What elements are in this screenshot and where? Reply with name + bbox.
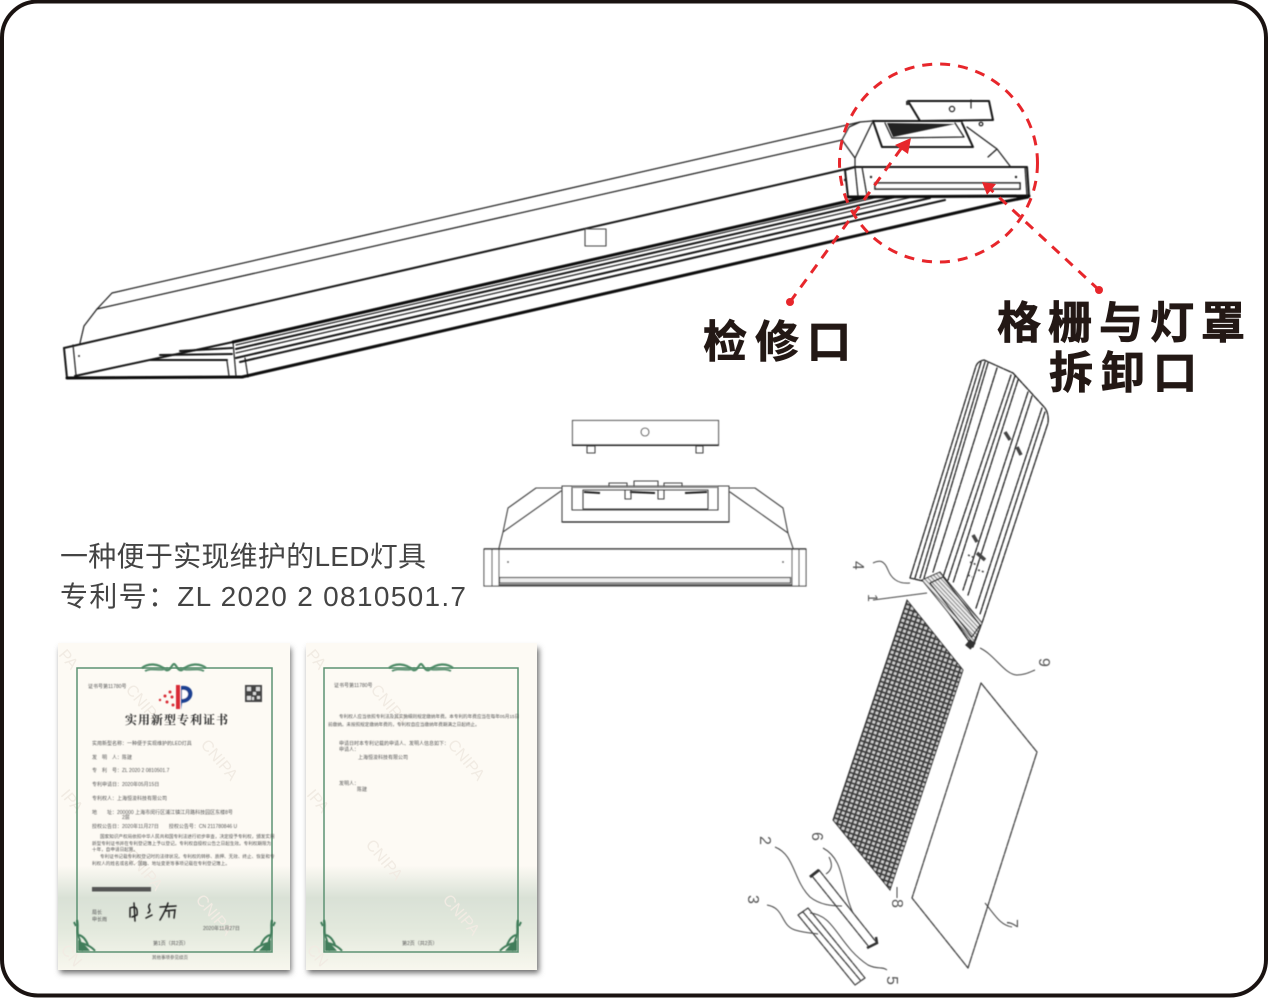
director title [92,909,107,923]
green border [324,668,518,952]
part 6: 6 [808,832,825,841]
fixture right end panel [844,167,1029,197]
certificate page two [303,643,539,973]
footer note: 其他事项参见续页 [152,954,188,961]
front view drawing [484,420,806,586]
part 2 [756,836,842,906]
QR code [245,685,262,702]
corner ornaments [74,920,275,951]
page sheet [58,643,290,970]
page sheet [306,643,537,970]
patent name: 一种便于实现维护的LED灯具 [60,541,426,572]
front panel [484,549,806,586]
patent name and number [60,541,466,615]
notice text [328,713,519,728]
dashed highlight circle [840,64,1038,262]
green border [77,668,272,952]
notice text: 前缴纳。未按照规定缴纳年费的，专利权自应当缴纳年费期满之日起终止。 [328,721,480,728]
part 1: 1 [865,594,881,602]
watermarks: CNIPA [192,892,236,939]
applicant and inventor details: 发明人： [339,780,359,787]
certificate page one [55,643,291,973]
certificate details [92,740,238,830]
inspection lid [906,100,993,126]
watermarks [303,647,488,970]
part 4: 4 [849,561,866,570]
label: removal opening: 拆卸口 [1049,349,1205,398]
part 2: 2 [756,836,773,845]
top ornament [142,664,206,671]
applicant and inventor details: 陈建 [357,786,367,793]
applicant and inventor details [339,740,449,793]
label: grille and cover: 格栅与灯罩 [997,299,1252,348]
watermarks: CNIPA [367,682,411,729]
exploded view drawing [744,360,1052,985]
notice text: 专利权人应当依照专利法及其实施细则规定缴纳年费。本专利的年费应当在每年05月15日 [339,713,519,720]
body [499,481,793,548]
certificate number: 证书号第11780号 [334,682,373,689]
watermarks: CNIPA [197,737,241,784]
certificate details: 专 利 号：ZL 2020 2 0810501.7 [92,767,170,774]
applicant and inventor details: 上海恒浚科技有限公司 [358,754,408,761]
CNIPA emblem [159,685,192,710]
watermarks: CN [303,942,331,970]
part 3 [744,895,818,934]
fixture housing top [64,121,872,348]
watermarks: CN [57,942,85,970]
watermarks: CNIPA [362,837,406,884]
applicant and inventor details: 申请日时本专利记载的申请人、发明人信息如下： [339,740,449,747]
patent number: 专利号：ZL 2020 2 0810501.7 [60,575,466,615]
page shadow [60,648,291,973]
corner ornaments [321,920,521,951]
fixture centre clip [585,229,606,246]
arrow: to removal opening [982,182,1103,294]
barcode [92,887,151,892]
part 5 [810,913,900,985]
certificate details: 发 明 人：陈建 [92,754,132,761]
certificate body paragraphs: 国家知识产权局依照中华人民共和国专利法进行初步审查，决定授予专利权，颁发实用 [100,833,275,840]
label: inspection opening: 检修口 [703,318,859,367]
certificate details: 授权公告日：2020年11月27日 授权公告号：CN 211780846 U [92,823,238,830]
part 7: 7 [1003,919,1020,928]
applicant and inventor details: 申请人： [339,746,359,753]
certificate body paragraphs: 利权人的姓名或名称、国籍、地址变更等事项记载在专利登记簿上。 [92,860,230,867]
end rail one [810,870,877,948]
part 8: 8 [888,899,905,908]
watermarks: PA [303,647,329,673]
watermarks: IPA [303,787,332,817]
certificate body paragraphs: 新型专利证书并在专利登记簿上予以登记。专利权自授权公告之日起生效。专利权期限为 [92,840,272,847]
certificate details: 地 址：200000 上海市闵行区浦江镇江月路科技园区东楼8号 [92,809,233,816]
housing [910,360,1048,650]
certificate details: 专利权人：上海恒浚科技有限公司 [92,795,167,802]
fixture left end [64,342,248,378]
diffuser cover panel [912,683,1037,968]
top ornament [389,664,453,671]
page number: 第2页（共2页） [402,940,438,947]
callout: inspection opening [703,64,1038,367]
watermarks: IPA [57,787,86,817]
certificate number: 证书号第11780号 [88,683,127,690]
certificate body paragraphs: 专利证书记载专利权登记时的法律状况。专利权的转移、质押、无效、终止、恢复和专 [100,853,275,860]
page shadow [308,648,539,973]
certificate details: 专利申请日：2020年05月15日 [92,781,159,788]
director title: 申长雨 [92,916,107,923]
main LED fixture drawing [64,100,1029,378]
fixture long lower rails [233,197,1028,377]
part 9 [980,648,1052,675]
director title: 局长 [92,909,102,916]
watermarks: CNIPA [122,682,166,729]
part 4 [849,561,910,583]
grille mesh [833,600,963,890]
watermarks [55,647,241,970]
arrow: to inspection opening [786,138,911,306]
part 7 [985,903,1020,928]
part 1 [865,593,927,602]
callout: grille and cover removal opening [982,182,1252,398]
director signature [130,903,176,921]
part 8 [888,887,905,908]
part 6 [808,832,853,913]
watermarks: CNIPA [439,892,483,939]
certificate body paragraphs [92,833,275,867]
part 3: 3 [744,895,761,904]
issue date: 2020年11月27日 [203,925,240,932]
inspection opening [873,121,1010,166]
part 5: 5 [883,976,900,985]
watermarks: CNIPA [444,737,488,784]
watermarks: PA [55,647,81,673]
certificate details: 2层 [122,815,130,821]
part 9: 9 [1035,658,1052,667]
certificate body paragraphs: 十年，自申请日起算。 [92,846,138,853]
certificate details: 实用新型名称：一种便于实现维护的LED灯具 [92,740,192,747]
page number: 第1页（共2页） [153,940,189,947]
end rail two [798,908,865,985]
watermarks: CNIPA [122,847,166,894]
part number leaders and labels [744,561,1052,985]
certificate title: 实用新型专利证书 [125,711,229,728]
lid [572,420,718,453]
